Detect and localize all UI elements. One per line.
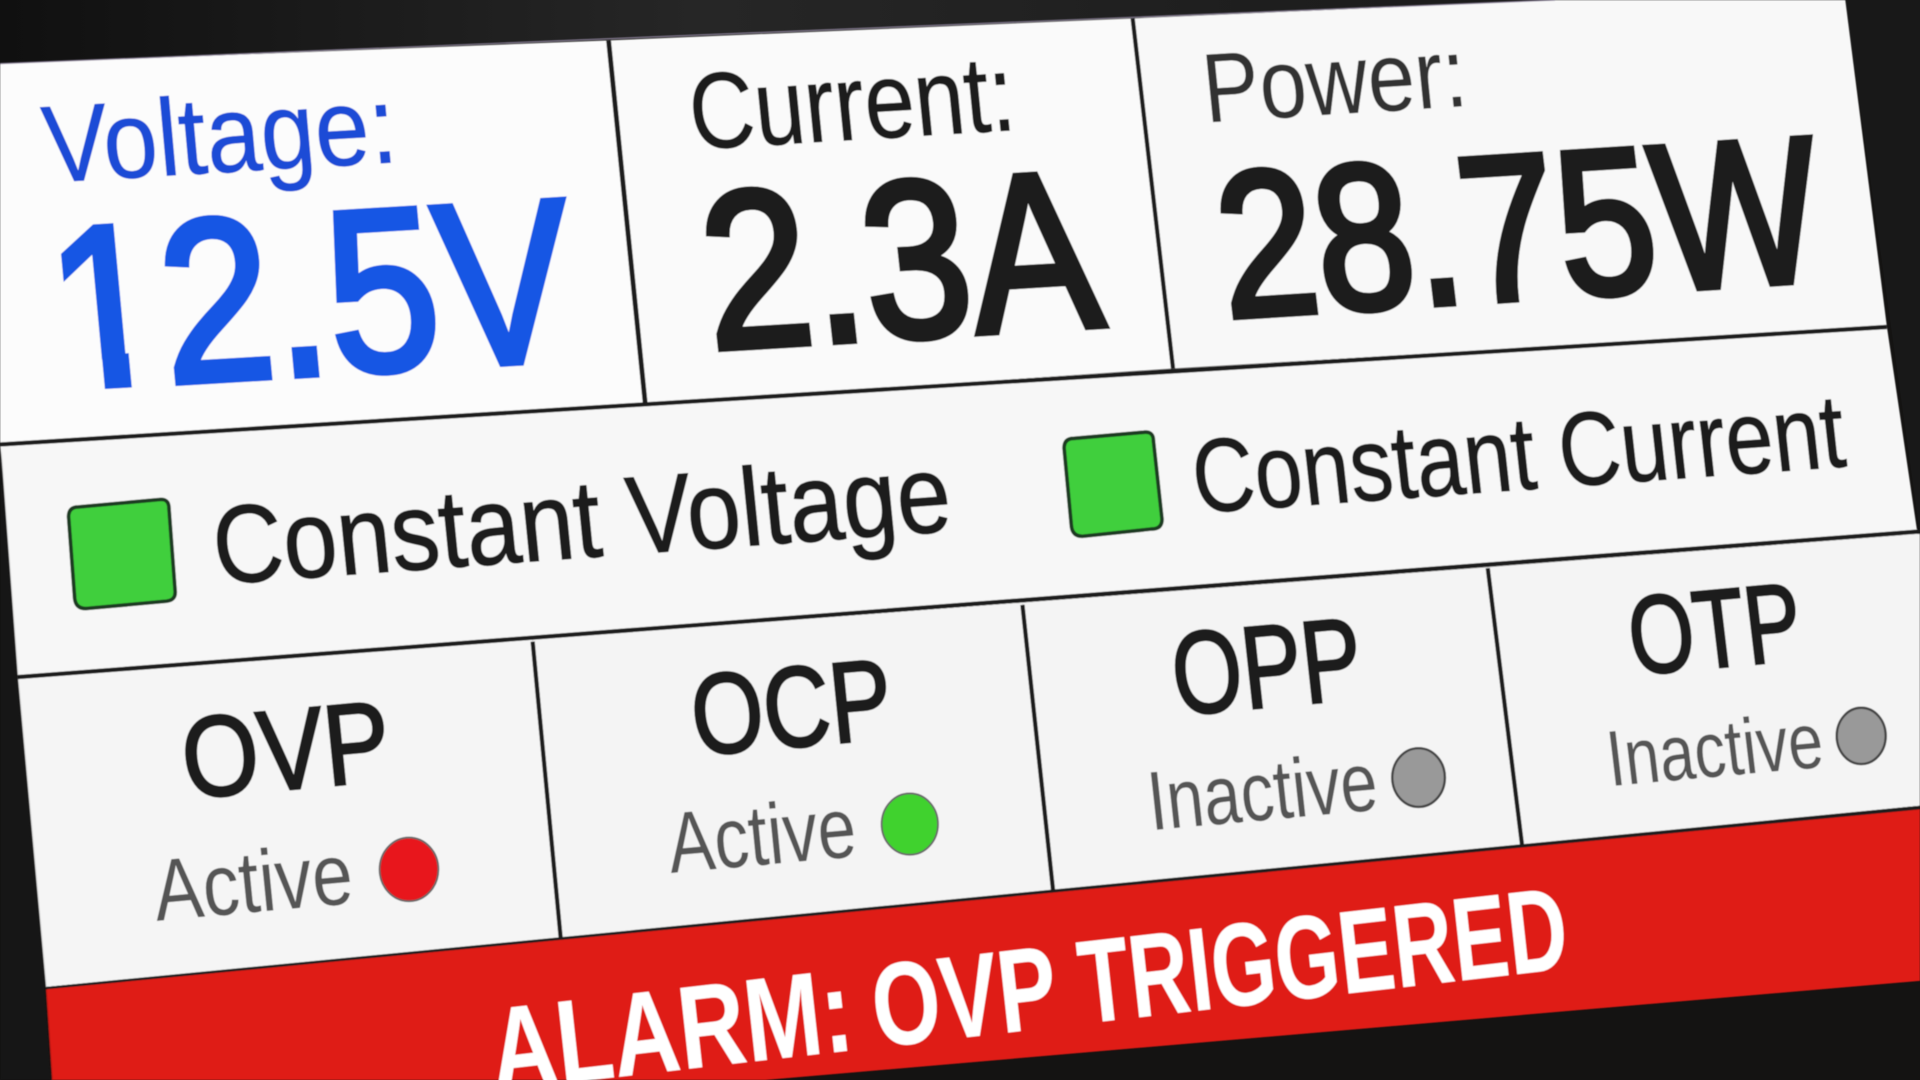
current label: Current: — [683, 32, 1020, 172]
panel: OCP status — [533, 602, 1053, 939]
panel: power readout — [1133, 0, 1887, 369]
panel: voltage readout — [0, 40, 645, 444]
OCP heading: OCP — [685, 635, 898, 780]
alarm text — [483, 863, 1574, 1080]
voltage value: 12.5V — [38, 150, 583, 438]
OPP status text: Inactive — [1143, 734, 1382, 848]
OCP status text: Active — [663, 780, 860, 892]
panel: regulation modes — [0, 327, 1918, 677]
icon: constant voltage indicator — [69, 499, 175, 609]
alarm text: OVP — [865, 921, 1063, 1073]
OTP heading: OTP — [1622, 561, 1808, 699]
panel: OPP status — [1022, 567, 1522, 890]
left bezel edge — [0, 447, 51, 1080]
OPP heading: OPP — [1165, 593, 1368, 740]
panel: OVP status — [17, 639, 561, 987]
constant voltage label: Constant Voltage — [207, 432, 956, 608]
OVP heading: OVP — [176, 677, 396, 823]
panel: current readout — [609, 18, 1173, 404]
icon: grey status dot — [1392, 748, 1445, 807]
OTP status text: Inactive — [1602, 696, 1828, 803]
current value: 2.3A — [689, 124, 1111, 397]
icon: green status dot — [882, 793, 938, 855]
icon: grey status dot — [1837, 708, 1886, 764]
alarm banner — [45, 809, 1920, 1080]
alarm text: TRIGGERED — [1072, 863, 1574, 1050]
icon: constant current indicator — [1064, 432, 1162, 536]
power label: Power: — [1197, 17, 1471, 143]
icon: red status dot — [380, 838, 438, 901]
power value: 28.75W — [1205, 93, 1832, 361]
panel: OTP status — [1488, 534, 1920, 845]
OVP status text: Active — [149, 824, 357, 940]
voltage label: Voltage: — [38, 64, 401, 206]
